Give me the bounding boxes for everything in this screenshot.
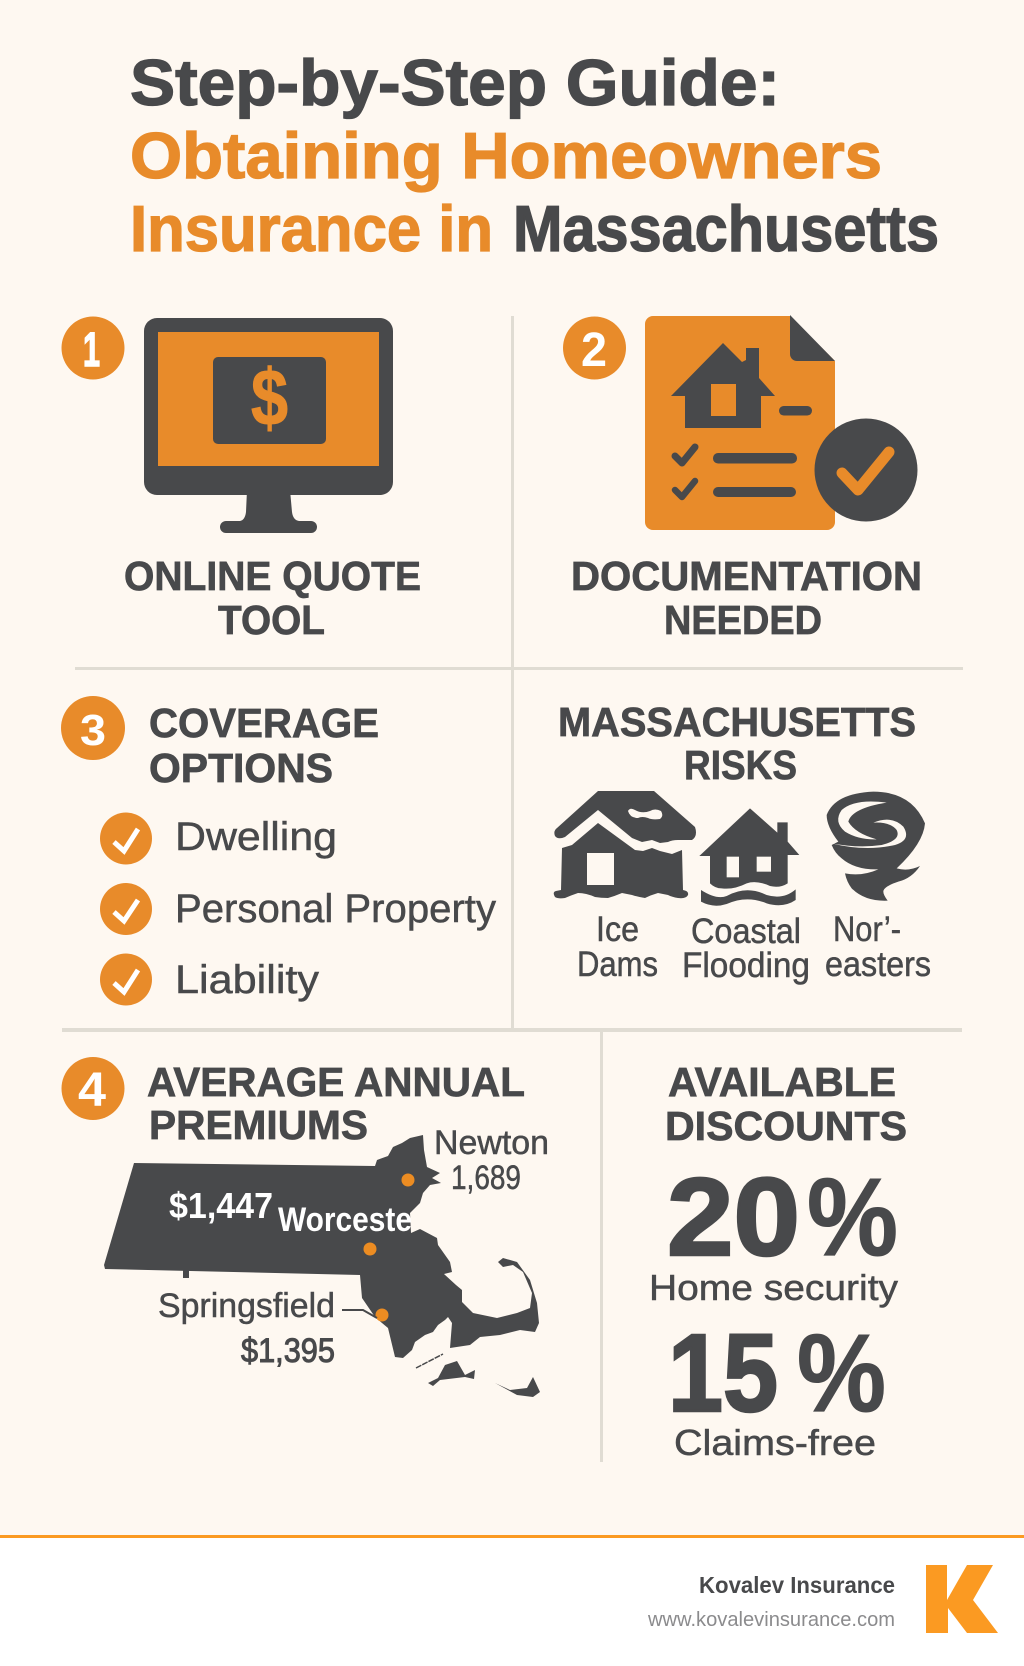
panel: step 3 coverage options xyxy=(61,696,496,1006)
step 1 heading xyxy=(124,553,421,643)
step 2 heading xyxy=(571,553,922,643)
map label: statewide average: $1,447 xyxy=(169,1185,273,1226)
step 1 heading: TOOL xyxy=(218,597,325,643)
discount: 20% home security: % xyxy=(807,1156,898,1279)
discount: 20% home security: Home security xyxy=(649,1267,898,1308)
discount: 15% claims-free: 15 xyxy=(668,1312,778,1435)
risks heading: RISKS xyxy=(684,742,797,788)
step 4 heading: AVERAGE ANNUAL xyxy=(147,1059,525,1105)
panel: available discounts xyxy=(649,1059,907,1463)
step 3 heading: OPTIONS xyxy=(149,745,333,791)
map label: worcester: Worceste xyxy=(278,1201,412,1239)
discount: 15% claims-free: Claims-free xyxy=(674,1422,876,1463)
discount: 20% home security xyxy=(649,1156,898,1308)
step 3 badge: 3 xyxy=(80,706,106,755)
footer company name: Kovalev Insurance xyxy=(699,1572,895,1598)
map label: springfield: $1,395 xyxy=(241,1332,335,1370)
panel: step 2 documentation needed xyxy=(563,315,922,643)
map label: springfield xyxy=(158,1287,335,1370)
title xyxy=(130,46,939,265)
risk label: ice dams: Dams xyxy=(577,945,658,984)
risk label: coastal flooding xyxy=(682,912,810,985)
step 2 badge: 2 xyxy=(581,324,607,377)
discount: 15% claims-free xyxy=(668,1312,886,1463)
coverage item: liability xyxy=(100,954,319,1006)
step 4 badge xyxy=(62,1057,124,1120)
map label: springfield: Springsfield xyxy=(158,1287,335,1325)
risks heading: MASSACHUSETTS xyxy=(558,699,916,745)
map label: newton: Newton xyxy=(434,1124,549,1162)
footer xyxy=(0,1535,1024,1666)
title: Step-by-Step Guide: xyxy=(130,46,780,119)
title: Insurance in xyxy=(130,192,493,265)
risk label: nor'easters: easters xyxy=(825,945,931,984)
discount: 15% claims-free: % xyxy=(797,1312,886,1435)
discounts heading xyxy=(665,1059,907,1149)
discounts heading: DISCOUNTS xyxy=(665,1103,907,1149)
discounts heading: AVAILABLE xyxy=(668,1059,896,1105)
panel: step 1 online quote tool xyxy=(62,316,421,643)
step 3 badge xyxy=(61,696,125,760)
step 1 badge: 1 xyxy=(83,324,100,377)
map label: newton: 1,689 xyxy=(451,1159,521,1197)
step 3 heading: COVERAGE xyxy=(149,700,379,746)
coverage item: dwelling: Dwelling xyxy=(175,815,337,859)
step 2 heading: DOCUMENTATION xyxy=(571,553,922,599)
footer website: www.kovalevinsurance.com xyxy=(647,1609,895,1631)
step 2 badge xyxy=(563,316,626,380)
risks heading xyxy=(558,699,916,788)
risk label: nor'easters: Nor’- xyxy=(833,910,901,949)
step 4 badge: 4 xyxy=(78,1064,106,1117)
step 4 heading xyxy=(147,1059,525,1148)
risk label: coastal flooding: Coastal xyxy=(691,912,801,951)
icon: coastal flooding house xyxy=(699,808,799,906)
panel: step 4 average annual premiums xyxy=(62,1057,549,1397)
icon: computer monitor with dollar sign: $ xyxy=(251,353,288,442)
icon: document with house and check xyxy=(645,315,918,530)
coverage item: personal property: Personal Property xyxy=(175,887,496,931)
map label: newton xyxy=(434,1124,549,1197)
coverage item: personal property xyxy=(100,883,496,935)
title: Obtaining Homeowners xyxy=(130,119,882,192)
step 3 heading xyxy=(149,700,379,791)
step 4 heading: PREMIUMS xyxy=(149,1102,368,1148)
risk label: ice dams xyxy=(577,910,658,984)
panel: massachusetts risks xyxy=(554,699,931,985)
title: Massachusetts xyxy=(513,192,939,265)
icon: ice dam house xyxy=(554,791,696,898)
massachusetts map xyxy=(104,1135,540,1397)
icon: nor'easter swirl xyxy=(827,792,925,901)
risk label: ice dams: Ice xyxy=(596,910,639,949)
step 1 badge xyxy=(62,316,124,380)
icon: computer monitor with dollar sign xyxy=(144,318,393,533)
logo: K mark xyxy=(926,1565,998,1633)
coverage item: liability: Liability xyxy=(175,958,319,1002)
risk label: nor'easters xyxy=(825,910,931,984)
coverage item: dwelling xyxy=(100,812,337,864)
step 2 heading: NEEDED xyxy=(664,597,822,643)
risk label: coastal flooding: Flooding xyxy=(682,946,810,985)
step 1 heading: ONLINE QUOTE xyxy=(124,553,421,599)
discount: 20% home security: 20 xyxy=(667,1156,800,1279)
